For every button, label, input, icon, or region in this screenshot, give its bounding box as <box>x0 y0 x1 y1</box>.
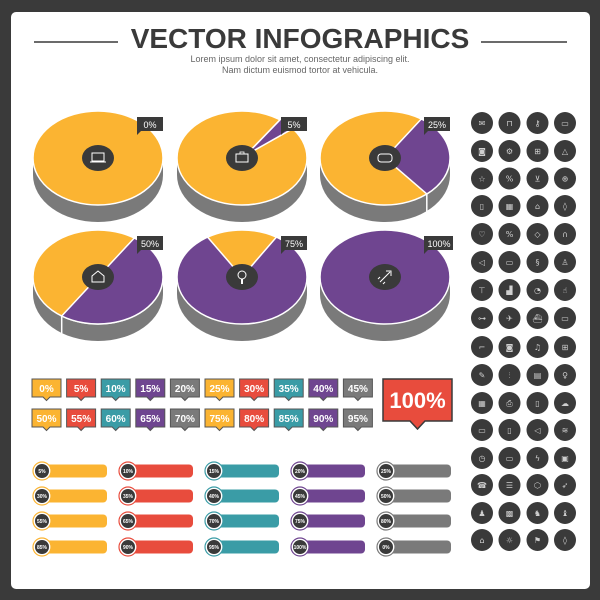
tags row 1: 0% <box>39 384 54 395</box>
pie chart: 50%: 50% <box>141 239 159 249</box>
icon grid: ♝ <box>561 509 569 518</box>
icon grid: ⊞ <box>562 343 568 352</box>
tags row 2 <box>32 409 372 430</box>
icon grid: % <box>506 174 514 184</box>
bars column: teal: 95% <box>209 545 220 551</box>
pie chart: 100% <box>320 230 453 341</box>
bars column: purple: 75% <box>295 519 306 525</box>
icon grid: ☎ <box>477 481 487 490</box>
tags row 2: 85% <box>279 414 299 425</box>
icon grid: % <box>506 230 514 239</box>
tags row 2: 75% <box>209 414 230 425</box>
icon grid: ⫶ <box>508 371 510 380</box>
icon grid: ◁ <box>478 258 485 267</box>
icon grid: ⊤ <box>479 286 486 295</box>
icon grid: ☆ <box>478 174 486 184</box>
tags row 1: 15% <box>140 384 160 395</box>
icon grid: ➶ <box>562 481 568 490</box>
subtitle: Lorem ipsum dolor sit amet, consectetur adipiscing elit. <box>190 54 410 64</box>
icon grid: ▩ <box>506 509 513 518</box>
tags row 1: 10% <box>106 384 126 395</box>
tags row 1 <box>32 379 372 400</box>
icon grid: ▤ <box>534 371 541 380</box>
icon grid: ☁ <box>561 399 569 408</box>
icon grid: ⬡ <box>534 481 541 490</box>
icon grid: ☝ <box>563 286 568 295</box>
icon grid: ✉ <box>479 119 485 128</box>
icon grid: ⌐ <box>479 343 486 352</box>
icon grid: ⛴ <box>532 314 543 323</box>
pie chart: 5% <box>177 111 307 222</box>
icon grid: ⊶ <box>478 314 486 323</box>
callout: 100%: 100% <box>389 388 446 413</box>
tags row 1: 20% <box>175 384 195 395</box>
icon grid: ▭ <box>478 426 486 435</box>
bars column: gray: 25% <box>381 469 392 475</box>
tags row 1: 30% <box>244 384 264 395</box>
tags row 2: 55% <box>71 414 91 425</box>
pie chart: 100%: 100% <box>427 239 451 249</box>
icon grid: ⊕ <box>562 174 568 184</box>
bars column: purple: 45% <box>295 494 306 500</box>
icon grid: ⌂ <box>479 536 485 545</box>
icon grid: ▯ <box>507 426 512 435</box>
icon grid: ♡ <box>478 230 486 239</box>
tags row 1: 35% <box>279 384 299 395</box>
icon grid: ⚑ <box>534 536 541 545</box>
pie chart: 5%: 5% <box>287 120 301 130</box>
icon grid: ⊞ <box>534 147 541 156</box>
bars column: yellow <box>33 462 107 556</box>
icon grid: ✎ <box>479 371 485 380</box>
tags row 1: 45% <box>348 384 368 395</box>
bars column: red: 35% <box>123 494 134 500</box>
icon grid: ⌂ <box>535 202 540 211</box>
bars column: gray: 0% <box>382 545 390 551</box>
icon grid: ◊ <box>563 536 567 545</box>
icon grid: ♞ <box>534 509 541 518</box>
progress bars <box>33 462 451 556</box>
icon grid: ≋ <box>562 426 568 435</box>
tags row 2: 65% <box>140 414 160 425</box>
tags row 2: 50% <box>36 414 57 425</box>
icon grid: ☼ <box>506 536 513 545</box>
pie chart: 25%: 25% <box>428 120 446 130</box>
icon grid: ▣ <box>561 454 569 463</box>
icon grid: § <box>536 258 540 267</box>
subtitle: Nam dictum euismod tortor at vehicula. <box>222 65 378 75</box>
icon grid: ☰ <box>506 481 513 490</box>
pie chart: 0% <box>33 111 163 222</box>
icon grid: ▯ <box>480 202 484 211</box>
icon grid: ⊻ <box>535 174 541 184</box>
percentage tags <box>32 379 372 430</box>
tags row 1: 5% <box>74 384 88 395</box>
icon grid: ▟ <box>505 285 513 295</box>
callout: 100% <box>383 379 452 429</box>
icon grid: ♟ <box>478 509 486 518</box>
icon grid: ◊ <box>563 202 567 211</box>
tags row 2: 60% <box>106 414 126 425</box>
tags row 2: 90% <box>313 414 333 425</box>
bars column: yellow: 55% <box>37 519 48 525</box>
pie chart: 0%: 0% <box>143 120 157 130</box>
title: VECTOR INFOGRAPHICS <box>131 23 469 54</box>
bars column: purple <box>291 462 365 556</box>
bars column: teal <box>205 462 279 556</box>
tags row 1: 40% <box>313 384 333 395</box>
bars column: red <box>119 462 193 556</box>
icon grid: ◔ <box>534 286 541 295</box>
bars column: yellow: 5% <box>38 469 46 475</box>
bars column: gray: 80% <box>381 519 392 525</box>
bars column: red: 90% <box>123 545 134 551</box>
icon grid: ▦ <box>506 202 513 211</box>
icon grid: ▭ <box>506 258 513 267</box>
bars column: yellow: 85% <box>37 545 48 551</box>
icon grid: ◇ <box>534 230 541 239</box>
icon grid: ◙ <box>506 343 513 352</box>
icon grid: ⚙ <box>506 147 513 156</box>
bars column: teal: 15% <box>209 469 220 475</box>
bars column: purple: 20% <box>295 469 306 475</box>
bars column: yellow: 30% <box>37 494 48 500</box>
icon grid: ◷ <box>479 454 486 463</box>
icon grid: ◁ <box>533 426 541 435</box>
tags row 2: 95% <box>348 414 368 425</box>
bars column: teal: 70% <box>209 519 220 525</box>
icon grid: ∩ <box>562 230 568 239</box>
icon grid: ⚷ <box>535 119 540 128</box>
icon grid: ♫ <box>534 343 541 352</box>
icon grid: ⎙ <box>506 399 513 408</box>
bars column: gray <box>377 462 451 556</box>
icon grid: ◙ <box>478 147 486 156</box>
bars column: gray: 50% <box>381 494 392 500</box>
pie chart: 75%: 75% <box>285 239 303 249</box>
bars column: red: 65% <box>123 519 134 525</box>
tags row 1: 25% <box>209 384 230 395</box>
icon grid: ♀ <box>562 371 568 380</box>
icon grid: ✈ <box>506 314 513 323</box>
bars column: teal: 40% <box>209 494 220 500</box>
icon grid <box>471 112 576 551</box>
icon grid: ▭ <box>561 314 569 323</box>
pie chart: 75% <box>177 230 307 341</box>
pie chart: 25% <box>320 111 450 222</box>
tags row 2: 80% <box>244 414 264 425</box>
pie chart: 50% <box>33 230 163 341</box>
icon grid: △ <box>562 147 569 156</box>
icon grid: ▯ <box>535 399 540 408</box>
bars column: purple: 100% <box>294 545 307 551</box>
bars column: red: 10% <box>123 469 134 475</box>
icon grid: ϟ <box>535 454 540 463</box>
subtitle <box>190 54 410 75</box>
icon grid: ▭ <box>561 119 569 128</box>
icon grid: ♙ <box>561 258 569 267</box>
tags row 2: 70% <box>175 414 195 425</box>
icon grid: ▭ <box>506 454 513 463</box>
icon grid: ⊓ <box>506 119 513 128</box>
icon grid: ▦ <box>478 399 486 408</box>
